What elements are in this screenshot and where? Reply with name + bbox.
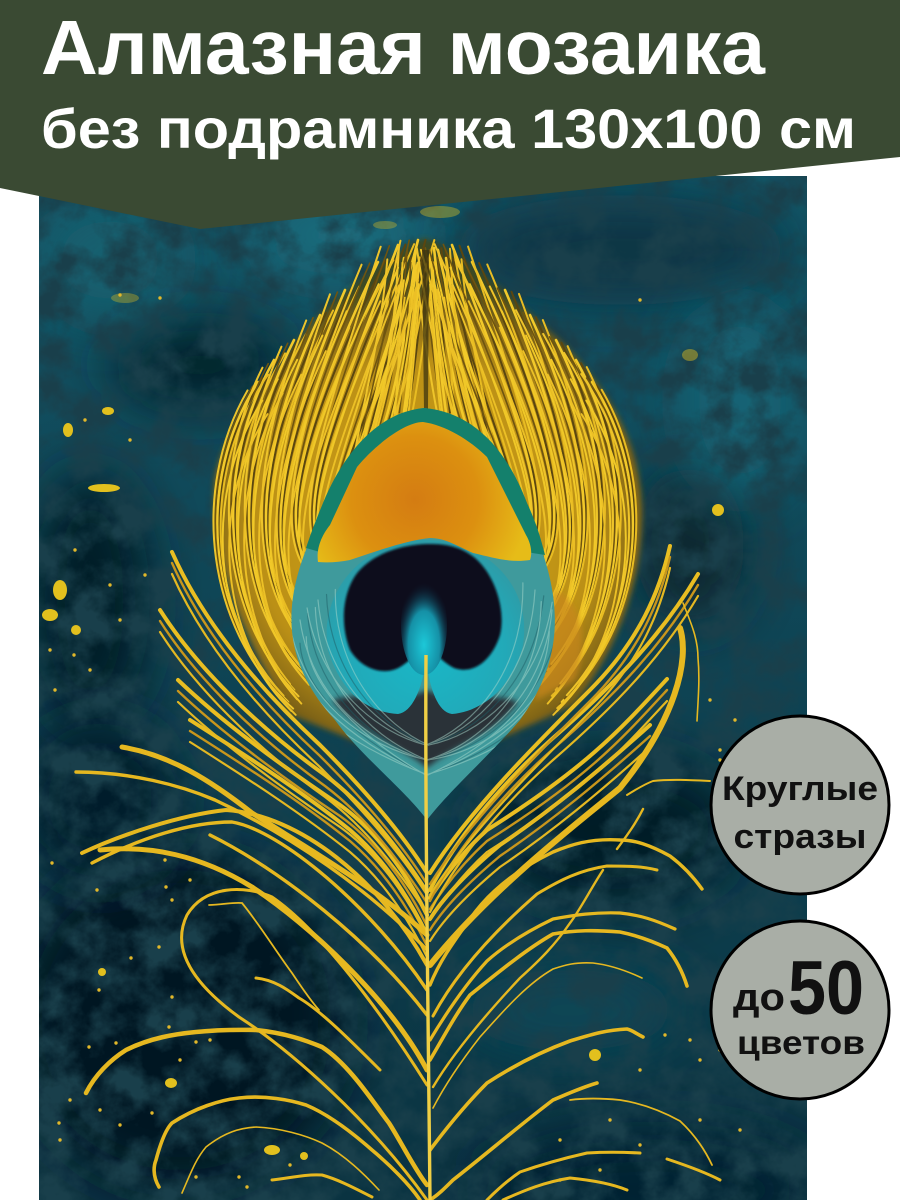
badge: round rhinestones: стразы <box>734 818 866 856</box>
feather: lower dark band <box>332 690 518 768</box>
feather: eye field stripes <box>292 582 553 776</box>
feather: dark eye lobes <box>344 544 502 675</box>
badge: round rhinestones <box>711 716 889 894</box>
feather: lower barbs left <box>76 747 427 1200</box>
badge: up to 50 colours: 50 <box>788 946 864 1031</box>
badge: up to 50 colours: до <box>733 977 785 1019</box>
feather: upper golden fan <box>200 230 649 770</box>
badge: up to 50 colours: цветов <box>737 1024 865 1061</box>
panel: artwork background <box>10 176 820 1200</box>
feather: lower barbs right <box>430 603 720 1200</box>
feather: upper lower-barbs <box>160 546 698 957</box>
feather: cyan eye <box>327 540 524 714</box>
feather: central shaft <box>426 655 430 1200</box>
title line 2: без подрамника 130х100 см <box>41 97 856 160</box>
feather: teal eye field <box>291 408 555 820</box>
title line 1: Алмазная мозаика <box>41 5 766 91</box>
gold speckles <box>42 206 740 1187</box>
header banner <box>0 0 900 229</box>
badge: round rhinestones: Круглые <box>722 770 878 808</box>
feather: orange dome <box>318 422 531 562</box>
feather: green edge above dome <box>306 408 545 555</box>
badge: up to 50 colours <box>711 921 889 1099</box>
